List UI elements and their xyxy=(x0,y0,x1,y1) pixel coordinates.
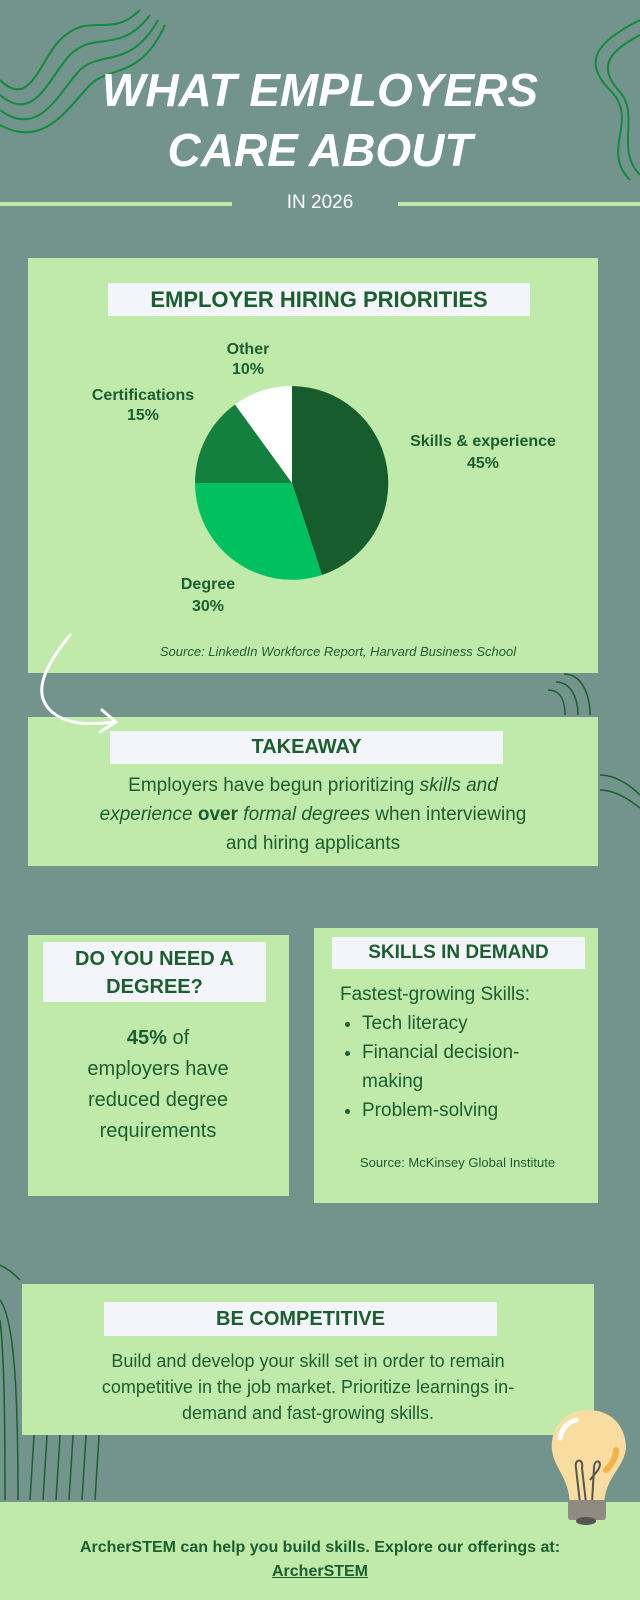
footer: ArcherSTEM can help you build skills. Explore our offerings at: xyxy=(80,1539,560,1556)
panel: hiring priorities: Degree xyxy=(181,576,235,593)
panel: degree: 45% of xyxy=(127,1027,189,1049)
title: WHAT EMPLOYERS xyxy=(102,64,538,116)
footer: ArcherSTEM xyxy=(272,1563,368,1580)
panel: skills in demand: Fastest-growing Skills: xyxy=(340,984,530,1005)
footer xyxy=(0,1502,640,1600)
panel: hiring priorities xyxy=(28,258,598,673)
panel: skills in demand xyxy=(314,928,598,1203)
source: Source: LinkedIn Workforce Report, Harvard Business School xyxy=(160,644,516,659)
labels xyxy=(227,341,270,378)
panel: degree: employers have xyxy=(87,1058,229,1080)
panel: be competitive: BE COMPETITIVE xyxy=(216,1308,385,1330)
panel: skills in demand: making xyxy=(362,1071,423,1092)
panel: takeaway: TAKEAWAY xyxy=(251,736,362,758)
panel: degree: reduced degree xyxy=(88,1089,228,1111)
title: CARE ABOUT xyxy=(168,124,472,176)
panel: hiring priorities: 45% xyxy=(467,455,499,472)
subtitle: IN 2026 xyxy=(287,192,353,213)
panel: takeaway: and hiring applicants xyxy=(226,833,400,854)
panel: skills in demand: Tech literacy xyxy=(362,1013,468,1034)
panel: be competitive: Build and develop your skill set in order to remain xyxy=(111,1351,505,1371)
heading: EMPLOYER HIRING PRIORITIES xyxy=(150,287,488,312)
panel: be competitive: demand and fast-growing skills. xyxy=(182,1403,434,1423)
arrow xyxy=(40,633,118,734)
panel: takeaway: Employers have begun prioritizing skills and xyxy=(128,775,498,796)
panel: hiring priorities: 15% xyxy=(127,407,159,424)
panel: degree xyxy=(28,935,289,1196)
panel: takeaway xyxy=(28,717,598,866)
pie chart xyxy=(195,386,388,580)
panel: degree: DEGREE? xyxy=(106,976,203,998)
panel: hiring priorities: Certifications xyxy=(92,387,194,404)
panel: hiring priorities: 30% xyxy=(192,598,224,615)
panel: degree: DO YOU NEED A xyxy=(75,948,234,970)
panel: skills in demand: SKILLS IN DEMAND xyxy=(368,942,549,963)
labels: Other xyxy=(227,341,269,358)
panel: skills in demand: Source: McKinsey Global Institute xyxy=(360,1155,555,1170)
panel: takeaway: experience over formal degrees when interviewing xyxy=(100,804,526,825)
panel: hiring priorities: Skills & experience xyxy=(410,433,556,450)
panel: be competitive: competitive in the job market. Prioritize learnings in- xyxy=(102,1377,514,1397)
title xyxy=(102,64,538,176)
panel: skills in demand: Problem-solving xyxy=(362,1100,498,1121)
panel: skills in demand: Financial decision- xyxy=(362,1042,519,1063)
panel: be competitive xyxy=(22,1284,594,1435)
heading xyxy=(108,283,530,316)
icon: light bulb xyxy=(552,1410,626,1525)
panel: degree: requirements xyxy=(100,1120,216,1142)
labels: 10% xyxy=(232,361,264,378)
